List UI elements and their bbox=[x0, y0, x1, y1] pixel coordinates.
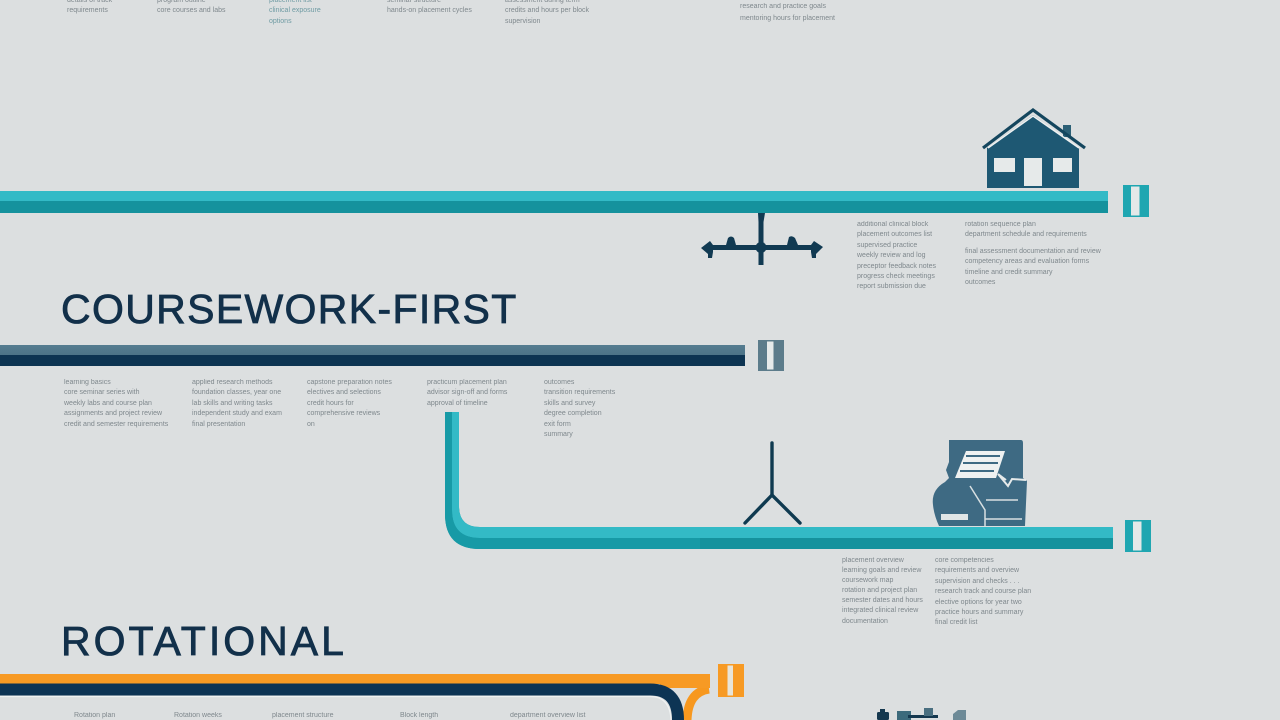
text block: placement note 1: learning goals and review bbox=[842, 567, 921, 574]
text block: top column 2: core courses and labs bbox=[157, 7, 225, 14]
text block: coursework column 5: transition requirements bbox=[544, 389, 615, 396]
text block: placement note 2: practice hours and summary bbox=[935, 609, 1023, 616]
text block: top column 4: hands-on placement cycles bbox=[387, 7, 472, 14]
text block: coursework column 2: final presentation bbox=[192, 421, 245, 428]
text block: coursework column 3 bbox=[307, 379, 392, 428]
text block: top column 1: requirements bbox=[67, 7, 108, 14]
text block: top track note 1 bbox=[857, 221, 936, 290]
text block: placement note 2: research track and course plan bbox=[935, 588, 1031, 595]
text block: placement note 2 bbox=[935, 557, 1031, 626]
text block: placement note 2: elective options for year two bbox=[935, 599, 1022, 606]
text block: top column 3: options bbox=[269, 18, 292, 25]
text block: top track note 2: outcomes bbox=[965, 279, 995, 286]
text block: top track note 1: weekly review and log bbox=[857, 252, 925, 259]
text block: top column 6 bbox=[740, 3, 835, 22]
text block: coursework column 5: skills and survey bbox=[544, 400, 595, 407]
text block: top column 6: research and practice goals bbox=[740, 3, 826, 10]
navy bar: coursework-first track bbox=[0, 345, 745, 366]
text block: top column 3 bbox=[269, 0, 321, 25]
text block: coursework column 4: approval of timeline bbox=[427, 400, 488, 407]
text block: coursework column 1: learning basics bbox=[64, 379, 111, 386]
text block: coursework column 5 bbox=[544, 379, 615, 438]
text block: rotational column 2: Rotation weeks bbox=[174, 712, 222, 719]
text block: coursework column 3: electives and selections bbox=[307, 389, 381, 396]
text block: top column 6: mentoring hours for placement bbox=[740, 15, 835, 22]
text block: coursework column 4 bbox=[427, 379, 508, 407]
text block: rotational column 4: Block length bbox=[400, 712, 438, 719]
text block: top column 5: supervision bbox=[505, 18, 540, 25]
text block: coursework column 2 bbox=[192, 379, 282, 428]
text block: top track note 1: progress check meetings bbox=[857, 273, 935, 280]
end bracket: top teal track bbox=[1123, 185, 1149, 217]
text block: rotational column 3: placement structure bbox=[272, 712, 333, 719]
text block: top column 3: clinical exposure bbox=[269, 7, 321, 14]
text block: rotational column 1: Rotation plan bbox=[74, 712, 115, 719]
text block: top track note 2 bbox=[965, 221, 1101, 286]
text block: coursework column 1 bbox=[64, 379, 168, 428]
text block: coursework column 5: outcomes bbox=[544, 379, 574, 386]
heading: coursework-first: COURSEWORK-FIRST bbox=[61, 286, 518, 332]
text block: coursework column 3: on bbox=[307, 421, 315, 428]
text block: placement note 1: semester dates and hours bbox=[842, 597, 923, 604]
heading: rotational: ROTATIONAL bbox=[61, 618, 347, 664]
text block: coursework column 4: practicum placement plan bbox=[427, 379, 507, 386]
text block: top track note 2: rotation sequence plan bbox=[965, 221, 1036, 228]
text block: placement note 2: supervision and checks . . . bbox=[935, 578, 1019, 585]
text block: coursework column 5: summary bbox=[544, 431, 573, 438]
text block: top column 5: credits and hours per block bbox=[505, 7, 589, 14]
end bracket: rotational track bbox=[718, 664, 744, 697]
teal bar: top track bbox=[0, 191, 1108, 213]
text block: placement note 1 bbox=[842, 557, 923, 625]
text block: placement note 1: coursework map bbox=[842, 577, 893, 584]
text block: placement note 2: requirements and overview bbox=[935, 567, 1019, 574]
text block: coursework column 3: comprehensive reviews bbox=[307, 410, 380, 417]
text block: top track note 1: supervised practice bbox=[857, 242, 917, 249]
text block: top track note 2: final assessment documentation and review bbox=[965, 248, 1101, 255]
text block: coursework column 5: exit form bbox=[544, 421, 571, 428]
text block: coursework column 2: independent study and exam bbox=[192, 410, 282, 417]
text block: top column 1 bbox=[67, 0, 112, 14]
text block: coursework column 2: foundation classes, year one bbox=[192, 389, 281, 396]
text block: coursework column 5: degree completion bbox=[544, 410, 602, 417]
text block: coursework column 3: credit hours for bbox=[307, 400, 354, 407]
text block: top column 4 bbox=[387, 0, 472, 14]
text block: coursework column 1: assignments and project review bbox=[64, 410, 162, 417]
end bracket: coursework-first track bbox=[758, 340, 784, 371]
text block: top track note 2: competency areas and evaluation forms bbox=[965, 258, 1089, 265]
text block: placement note 2: final credit list bbox=[935, 619, 977, 626]
text block: top column 2 bbox=[157, 0, 226, 14]
text block: top track note 1: additional clinical block bbox=[857, 221, 928, 228]
text block: coursework column 3: capstone preparation notes bbox=[307, 379, 392, 386]
text block: top track note 1: report submission due bbox=[857, 283, 926, 290]
text block: coursework column 4: advisor sign-off and forms bbox=[427, 389, 507, 396]
text block: coursework column 2: applied research methods bbox=[192, 379, 273, 386]
text block: top track note 2: timeline and credit summary bbox=[965, 269, 1053, 276]
text block: top track note 1: preceptor feedback notes bbox=[857, 263, 936, 270]
text block: placement note 1: documentation bbox=[842, 618, 888, 625]
text block: placement note 1: placement overview bbox=[842, 557, 904, 564]
text block: placement note 1: integrated clinical review bbox=[842, 607, 918, 614]
text block: rotational column 5: department overview list bbox=[510, 712, 585, 719]
text block: placement note 2: core competencies bbox=[935, 557, 994, 564]
text block: coursework column 1: credit and semester requirements bbox=[64, 421, 168, 428]
text block: coursework column 2: lab skills and writing tasks bbox=[192, 400, 273, 407]
text block: top track note 1: placement outcomes list bbox=[857, 231, 932, 238]
text block: coursework column 1: core seminar series with bbox=[64, 389, 139, 396]
end bracket: placement track bbox=[1125, 520, 1151, 552]
text block: placement note 1: rotation and project plan bbox=[842, 587, 917, 594]
text block: top track note 2: department schedule and requirements bbox=[965, 231, 1087, 238]
text block: top column 5 bbox=[505, 0, 589, 25]
text block: coursework column 1: weekly labs and course plan bbox=[64, 400, 152, 407]
